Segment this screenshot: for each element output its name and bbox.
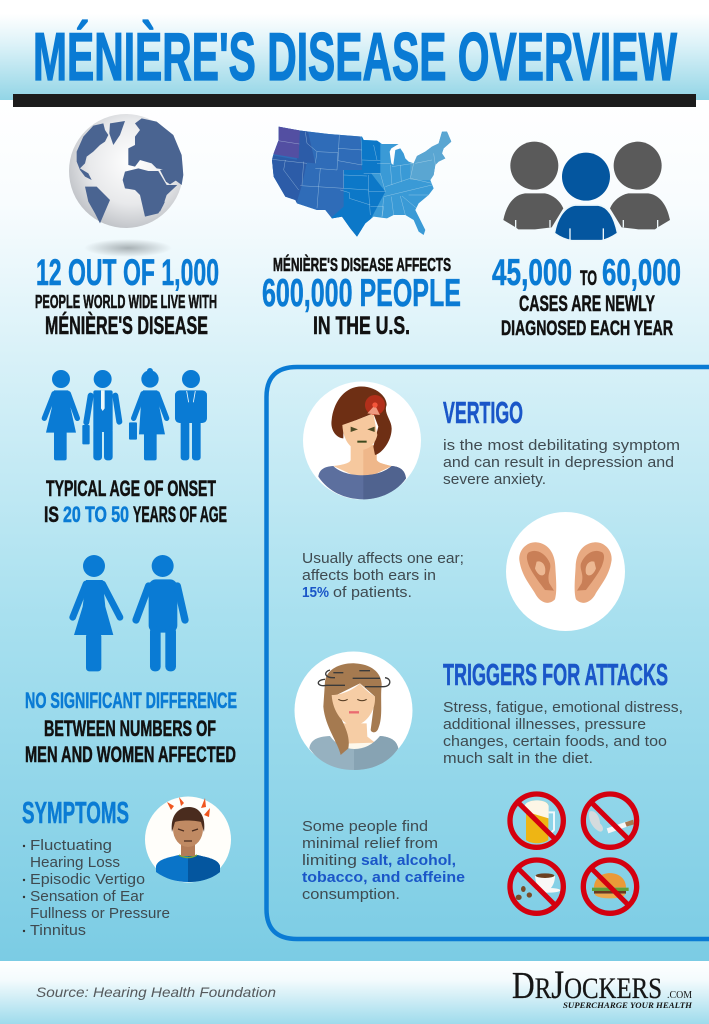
panel: vertigo and triggers	[266, 367, 709, 939]
stat text: PEOPLE WORLD WIDE LIVE WITH	[35, 291, 217, 312]
icon: globe	[69, 114, 183, 257]
stat: age of onset	[44, 368, 227, 527]
stat text: MÉNIÈRE'S DISEASE	[45, 311, 208, 340]
symptoms list	[23, 838, 170, 939]
stat text: MÉNIÈRE'S DISEASE AFFECTS	[273, 254, 451, 275]
vertigo text	[443, 438, 680, 488]
stat text: 12 OUT OF 1,000	[36, 252, 219, 293]
icon: woman with headache	[303, 382, 421, 500]
icon: no fast food	[583, 860, 637, 913]
triggers text: additional illnesses, pressure	[443, 717, 646, 733]
ear text: of patients.	[333, 585, 412, 601]
stat text: BETWEEN NUMBERS OF	[44, 716, 216, 741]
panel: symptoms	[22, 795, 231, 939]
ear text	[302, 551, 464, 601]
icon: no tobacco	[583, 794, 637, 847]
limiting text: salt, alcohol,	[361, 853, 456, 869]
triggers text: much salt in the diet.	[443, 751, 593, 767]
vertigo text: severe anxiety.	[443, 472, 546, 488]
stat text	[262, 254, 461, 340]
symptoms list: Hearing Loss	[30, 855, 120, 871]
symptoms list: Fluctuating	[30, 838, 112, 854]
title underline bar	[13, 94, 696, 107]
symptoms list: Sensation of Ear	[30, 889, 144, 905]
symptoms list: Tinnitus	[30, 923, 86, 939]
icon: dizzy woman	[294, 652, 412, 770]
triggers text	[443, 700, 683, 767]
header background	[0, 0, 709, 100]
ear text: 15%	[302, 585, 329, 601]
symptoms list: Episodic Vertigo	[30, 872, 145, 888]
stat text	[25, 688, 237, 767]
heading: symptoms: SYMPTOMS	[22, 795, 129, 830]
limiting text	[302, 819, 465, 903]
stat: 600,000 people	[262, 120, 462, 340]
limiting text: minimal relief from	[302, 836, 438, 852]
stat: men and women	[25, 555, 237, 767]
triggers text: Stress, fatigue, emotional distress,	[443, 700, 683, 716]
triggers text: changes, certain foods, and too	[443, 734, 667, 750]
stat text: MEN AND WOMEN AFFECTED	[25, 742, 236, 767]
limiting text: Some people find	[302, 819, 428, 835]
stat text	[492, 252, 681, 340]
stat text	[35, 252, 219, 340]
stat text: NO SIGNIFICANT DIFFERENCE	[25, 688, 237, 713]
stat text	[44, 476, 227, 527]
ear text: affects both ears in	[302, 568, 436, 584]
icon: ears	[506, 512, 625, 631]
stat text: 45,000	[492, 252, 572, 293]
stat: 12 out of 1,000	[35, 114, 219, 340]
icon: woman and man	[73, 555, 185, 671]
stat text: TYPICAL AGE OF ONSET	[46, 476, 216, 501]
vertigo text: and can result in depression and	[443, 455, 674, 471]
logo: DrJockers.com: .COM	[667, 989, 692, 1001]
limiting text: consumption.	[302, 887, 400, 903]
heading: vertigo: VERTIGO	[443, 395, 523, 430]
vertigo text: is the most debilitating symptom	[443, 438, 680, 454]
icon: no beer	[510, 794, 563, 847]
stat text: 20 TO 50	[63, 502, 129, 527]
stat text: YEARS OF AGE	[133, 502, 227, 527]
stat: 45,000 to 60,000	[492, 142, 681, 340]
stat text: TO	[580, 267, 597, 290]
icon: four business people	[44, 368, 207, 460]
stat text: IS	[44, 502, 59, 527]
stat text: 600,000 PEOPLE	[262, 272, 461, 315]
limiting text: limiting	[302, 853, 357, 869]
symptoms list: Fullness or Pressure	[30, 906, 170, 922]
logo: DrJockers.com: DRJOCKERS	[512, 962, 662, 1007]
icon: US map	[272, 126, 452, 236]
footer	[0, 961, 709, 1024]
stat text: IN THE U.S.	[313, 312, 410, 340]
icon: no caffeine	[510, 860, 563, 913]
ear text: Usually affects one ear;	[302, 551, 464, 567]
icon: group of people	[503, 142, 670, 241]
source text: Source: Hearing Health Foundation	[36, 984, 276, 1000]
limiting text: tobacco, and caffeine	[302, 870, 465, 886]
logo: DrJockers.com: SUPERCHARGE YOUR HEALTH	[563, 1000, 692, 1010]
icon: man in pain	[145, 796, 231, 882]
